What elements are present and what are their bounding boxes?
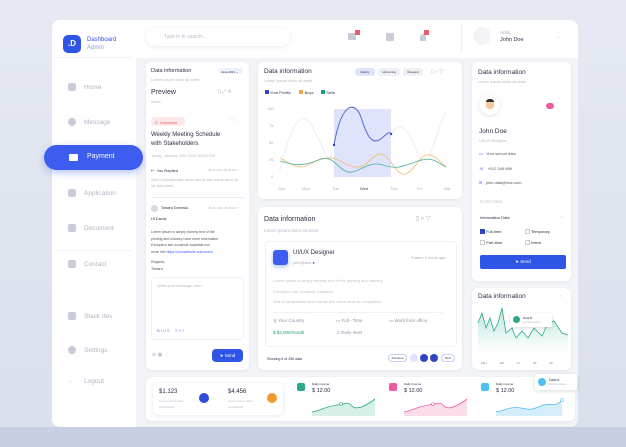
panel: profile: ^ (561, 214, 563, 219)
panel: bottom stats: Daily Income (496, 382, 513, 386)
panel: email preview: Data information (151, 68, 191, 74)
chart svg: Fri (417, 186, 422, 191)
tag important: D Important (155, 120, 177, 124)
message box (151, 277, 244, 340)
chart svg: Sat (444, 186, 451, 191)
header bar: John Doe (500, 37, 524, 43)
panel: email preview: Lorem Ipsum is simply dummy text of the (151, 230, 215, 234)
panel: job card: ▭ Work from office (389, 318, 427, 323)
panel: profile: Part-time (486, 240, 502, 245)
sidebar: Admin (87, 45, 104, 51)
panel: bottom stats: Lorem ipsum dolor (159, 399, 184, 403)
send button (212, 349, 243, 362)
panel: bottom stats: $ 12.00 (496, 388, 514, 394)
message box: B I U S ≡ ≡ ≡ (157, 328, 184, 333)
panel: profile: Temporary (531, 229, 550, 234)
panel: line chart: ▯ ⌕ ▽ (431, 69, 443, 75)
panel: job card: UI/UX Designer (293, 250, 335, 256)
panel: bottom stats: Lorem ipsum dolor (228, 399, 253, 403)
user (473, 27, 491, 45)
panel: line chart: Upcoming (382, 70, 396, 74)
sidebar: Dashboard (87, 37, 116, 43)
nav: payment active (44, 145, 143, 170)
panel: email preview: ○ ☆ (228, 117, 237, 123)
panel: job card: john@doe ● (293, 260, 315, 265)
panel: line chart: Data information (264, 68, 312, 75)
panel: email preview: ▯ ⤢ ✕ (218, 89, 232, 95)
panel: profile: ☏ +012 345 689 (479, 166, 512, 171)
nav items: Home (84, 84, 101, 90)
panel: email preview: Regards, (151, 260, 165, 264)
panel: profile: Lorem ipsum dolor sit amet (478, 79, 526, 84)
panel: email preview: Today, January 30th 2021 04:40 PM (151, 153, 215, 158)
text: Application (84, 190, 116, 196)
panel: bottom stats: $ 12.00 (404, 388, 422, 394)
panel: job card (258, 207, 462, 370)
panel: email preview: with Stakeholders (151, 141, 198, 147)
panel: job card: Data information (264, 216, 315, 223)
daily income green (297, 383, 305, 391)
panel: profile: UI/UX Designer (479, 138, 507, 143)
panel: small area chart: ⌕ (560, 293, 562, 298)
header bar: Hello, (500, 30, 512, 35)
panel: job card: Excepteur sint occaecat cupidatat (273, 288, 333, 294)
panel: profile: Intern (531, 240, 541, 245)
chart svg: Thu (390, 186, 397, 191)
tooltip: Data A (535, 374, 577, 390)
panel: profile: Full-time (486, 229, 501, 234)
panel: email preview: 28.01.2021 09:06 AM ⌃ (208, 206, 240, 210)
panel: email preview: Excepteur sint occaecat cupidatat non (151, 243, 210, 247)
panel: email preview: more info https://yourwebsite.com/users (151, 250, 213, 254)
chart svg: 0 (271, 174, 274, 179)
tag important (151, 117, 185, 126)
panel: profile: ✉ john.data@doe.com (479, 180, 522, 185)
tooltip: Data A: Data A (549, 378, 560, 382)
text: Settings (84, 346, 108, 354)
panel: profile: ⋮ (563, 102, 568, 108)
panel: line chart: Request (407, 70, 419, 74)
panel: bottom stats: $ 12.00 (312, 388, 330, 394)
panel: email preview: Preview (151, 89, 176, 96)
panel: bottom stats: consectetur (228, 405, 244, 409)
panel: profile: ▭ Your school data (479, 151, 516, 156)
panel: job card: Previous (392, 356, 403, 360)
panel: bottom stats: $1.123 (159, 389, 177, 395)
panel: profile (472, 62, 571, 281)
chart svg: Tue (332, 186, 340, 191)
chart svg (267, 106, 451, 191)
panel: job card: Showing 4 of 256 data (267, 357, 302, 361)
panel: line chart (258, 62, 462, 199)
chart svg: Mon (302, 186, 310, 191)
text: Logout (84, 378, 104, 385)
tooltip: Null Description (523, 321, 541, 324)
panel: profile: Information Data (480, 215, 510, 220)
panel: small area chart (472, 288, 571, 370)
panel: job card: Posted 3 hours ago (411, 255, 446, 260)
text: Message (84, 118, 110, 126)
panel: email preview: Sed ut perspiciatis unde omnis iste natus error sit (151, 177, 238, 182)
bottom band (0, 427, 626, 447)
panel: small area chart: Data information (478, 293, 526, 300)
panel: email preview: for this week... (151, 183, 177, 188)
panel: bottom stats: $4.456 (228, 389, 246, 395)
panel: bottom stats: Daily Income (404, 382, 421, 386)
panel: profile: Data information (478, 69, 526, 76)
panel: profile: FILTER JOBS (480, 200, 502, 204)
send button (480, 255, 566, 269)
header icons (348, 33, 356, 40)
panel: email preview: ⊘ ▣ ⋮ (152, 352, 169, 358)
search box: Type in to search... (164, 34, 206, 40)
panel: job card: ◎ Your Country (273, 318, 304, 323)
panel: bottom stats (146, 377, 575, 421)
tooltip: Data B (523, 316, 532, 320)
send button: ➤ Send (220, 353, 235, 358)
panel: email preview (146, 62, 249, 370)
icon: job (273, 250, 288, 265)
panel: email preview: Hi David, (151, 216, 167, 221)
tooltip: Data A: Null Description (549, 383, 567, 386)
panel: email preview: Tamara (151, 266, 163, 270)
chart svg: 50 (269, 140, 274, 145)
send button: ➤ Send (515, 259, 531, 264)
panel: job card: ▯ ⌕ ▽ (416, 216, 431, 222)
panel: email preview: Weekly Meeting Schedule (151, 132, 220, 138)
avatar (480, 95, 500, 115)
panel: email preview: 28.01.2021 09:06 AM ⌄ (208, 168, 240, 172)
panel: job card: ♙ Early level (336, 330, 362, 335)
panel: line chart: Lorem ipsum dolor sit amet (264, 78, 312, 83)
panel: email preview: Tamara Sorensko (161, 206, 188, 210)
tooltip (510, 313, 552, 327)
panel: job card: Sed ut perspiciatis unde omnis iste natus error sit voluptatem (273, 299, 381, 304)
logo: .D (68, 39, 76, 48)
panel: job card: $ $4,000/month (273, 330, 304, 335)
sidebar (52, 20, 136, 427)
text: ← (68, 378, 74, 385)
panel: job card: ▭ Full - Time (336, 318, 363, 323)
text: Stack dev (84, 312, 113, 320)
panel: line chart: History (360, 70, 370, 74)
panel: small area chart: 24H 1W 1Y 5Y All (481, 361, 553, 365)
panel: email preview: Lorem ipsum dolor sit amet (151, 77, 199, 82)
panel: email preview: Inbox (151, 99, 161, 104)
text: Contact (84, 260, 106, 268)
chart svg: 25 (269, 157, 274, 162)
header bar: ⌄ (556, 34, 560, 40)
header bar (136, 20, 578, 58)
chart svg: Sun (278, 186, 285, 191)
panel: email preview: printing and industry have more information (151, 236, 218, 240)
panel: email preview: June 2021 ⌄ (221, 70, 238, 74)
legend: Your Profits Buys Sells (270, 90, 335, 95)
daily income pink (389, 383, 397, 391)
daily income blue (481, 383, 489, 391)
panel: bottom stats: Daily Income (312, 382, 329, 386)
panel: job card: Lorem ipsum dolor sit amet (264, 228, 318, 233)
panel: job card: Lorem Ipsum is simply dummy text of the printing and industry (273, 278, 383, 283)
panel: profile: John Doe (479, 128, 507, 135)
text: Document (84, 224, 114, 232)
main window (52, 20, 578, 427)
panel: bottom stats: consectetur (159, 405, 175, 409)
chart svg: 75 (269, 123, 274, 128)
nav items (68, 83, 102, 91)
chart svg: Wed (360, 186, 368, 191)
panel: job card: Next (445, 356, 451, 360)
message box: Write your message here... (157, 283, 205, 288)
nav: payment active: Payment (87, 153, 115, 160)
logo (63, 35, 81, 53)
search box (146, 28, 290, 46)
chart svg: 100 (267, 106, 274, 111)
panel: email preview: ↩ You Replied (151, 168, 178, 173)
